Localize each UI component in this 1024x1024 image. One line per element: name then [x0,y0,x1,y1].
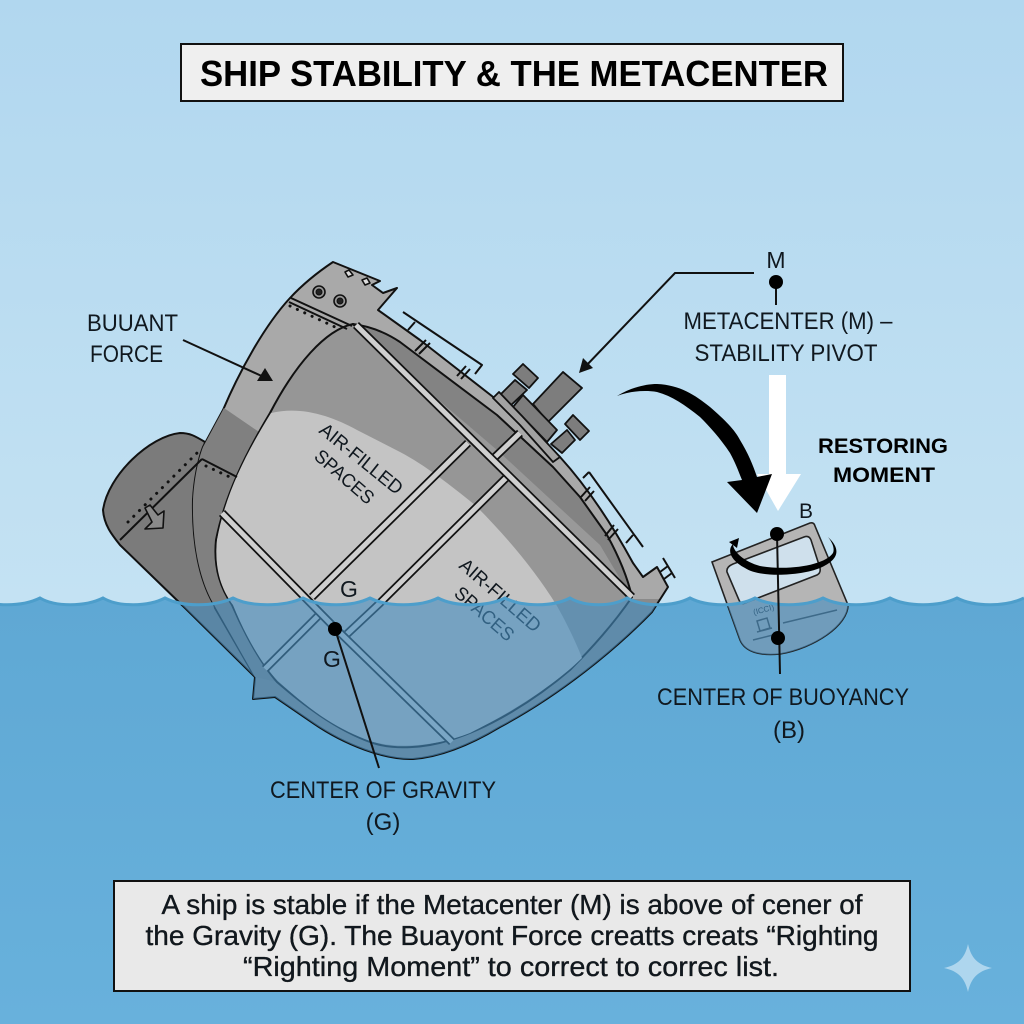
icon: sparkle [944,944,992,992]
deck rim ticks [415,340,618,540]
background: sky [0,0,1024,605]
label: B: B [799,500,813,523]
arrow: buoyant force [183,340,273,381]
boat tiny label: (ICCI) [752,603,775,617]
submerged boat tint [728,600,848,654]
explanation box: “Righting Moment” to correct to correc list. [243,951,779,982]
label: air-filled spaces upper: AIR-FILLED [315,420,407,499]
icon: hollow arrow on fin [145,505,164,529]
label: air-filled spaces upper: SPACES [310,446,378,509]
arrow: white downward [757,375,801,511]
railings [403,312,675,579]
label: center of gravity: (G) [366,809,400,836]
label: metacenter: STABILITY PIVOT [694,340,878,367]
crescent lighter wedge [380,350,628,592]
interior panel [215,324,632,747]
top seam lines [202,298,352,477]
crescent between rim and main beam [353,324,632,597]
rivets [128,306,335,522]
label: M: M [766,247,786,273]
arrow: restoring moment curved [617,384,772,513]
label: center of gravity [270,777,496,836]
center of gravity marker [328,622,379,768]
label: air-filled spaces lower: AIR-FILLED [455,555,545,637]
arrow: metacenter leader [579,273,754,373]
label: center of gravity: CENTER OF GRAVITY [270,777,496,804]
label: air-filled spaces lower: SPACES [450,583,518,646]
hull dark band [193,408,277,682]
rudder fin [103,433,255,677]
explanation box [114,881,910,991]
label: metacenter [684,308,893,367]
buoyancy axis and points [770,527,785,674]
boat window [727,536,820,604]
structural beams [222,325,632,742]
boat body [712,523,848,654]
metacenter marker [769,275,783,305]
main ship cross-section [103,262,675,759]
portholes [313,286,346,307]
waterline [0,598,1024,605]
label: restoring moment [818,435,948,487]
explanation box: A ship is stable if the Metacenter (M) is above of cener of [162,889,863,920]
background: sea [0,598,1024,1024]
label: restoring moment: MOMENT [833,464,935,487]
label: center of buoyancy [657,684,909,744]
rotation ring arrow [729,537,836,575]
label: center of buoyancy: CENTER OF BUOYANCY [657,684,909,711]
label: G upper: G [340,576,358,602]
boat markings [753,610,837,640]
title [181,44,843,101]
label: metacenter: METACENTER (M) – [684,308,893,335]
label: G lower: G [323,646,341,672]
label: buoyant force: BUUANT [87,310,178,337]
fin seam [120,459,202,540]
hull shell [193,262,668,759]
small windows [345,270,370,285]
label: buoyant force: FORCE [90,341,163,368]
label: buoyant force [87,310,178,368]
title: SHIP STABILITY & THE METACENTER [200,53,828,94]
label: restoring moment: RESTORING [818,435,948,458]
submerged hull tint [182,600,656,759]
explanation box: the Gravity (G). The Buayont Force creatts creats “Righting [146,920,878,951]
small boat diagram [712,523,848,654]
superstructure: fittings [493,364,589,462]
label: center of buoyancy: (B) [773,717,805,744]
interior light area [216,411,582,746]
